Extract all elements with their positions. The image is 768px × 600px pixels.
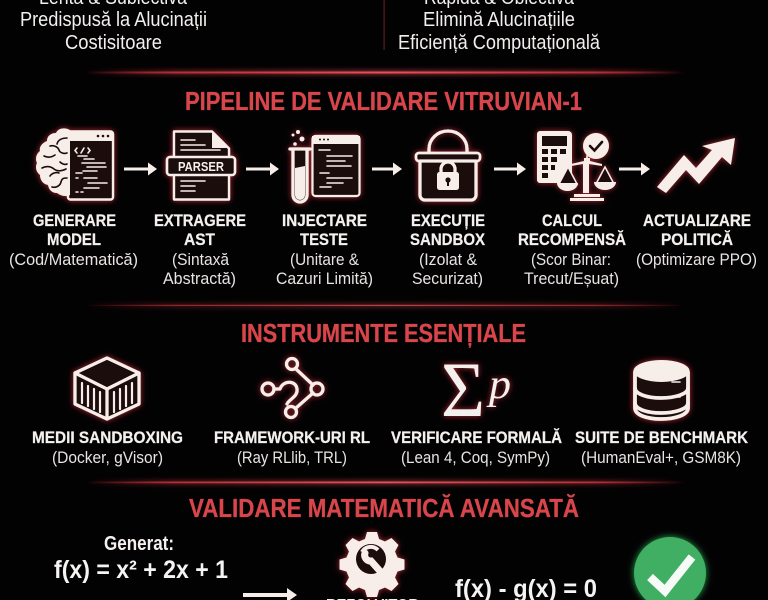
- generated formula: [54, 533, 228, 584]
- icon: workflow network: [262, 358, 323, 418]
- step label: calcul recompensa: RECOMPENSĂ: [518, 230, 626, 249]
- step label: actualizare politica: ACTUALIZARE: [643, 212, 751, 230]
- icon: green check: [634, 537, 706, 600]
- icon: solver gear and wrench: [340, 532, 404, 597]
- step label: injectare teste: TESTE: [300, 231, 348, 249]
- left column: traditional validation traits: [20, 0, 207, 54]
- step label: injectare teste: [276, 212, 373, 288]
- step label: extragere ast: (Sintaxă: [172, 250, 229, 269]
- right column: automated validation traits: Elimină Alucinațiile: [423, 9, 575, 31]
- right column: automated validation traits: [398, 0, 601, 54]
- step label: generare model: MODEL: [47, 231, 101, 249]
- icon: growth arrow: [657, 138, 735, 193]
- step label: injectare teste: INJECTARE: [282, 212, 367, 230]
- generated formula: f(x) = x² + 2x + 1: [54, 556, 228, 584]
- icon: database: [634, 360, 690, 419]
- left column: traditional validation traits: Predispusă la Alucinații: [20, 9, 207, 31]
- heading: tools: INSTRUMENTE ESENȚIALE: [241, 320, 526, 348]
- tool label: formal verification: (Lean 4, Coq, SymPy): [401, 448, 550, 467]
- tool label: sandboxing: (Docker, gVisor): [52, 448, 163, 467]
- step label: executie sandbox: (Izolat &: [419, 250, 478, 269]
- arrow: [494, 162, 526, 176]
- arrow: [372, 162, 402, 176]
- step label: extragere ast: Abstractă): [163, 269, 236, 288]
- step label: extragere ast: EXTRAGERE: [154, 212, 246, 230]
- icon: container: [75, 358, 139, 419]
- tool label: rl frameworks: [214, 429, 370, 467]
- icon: sigma p: p: [486, 362, 511, 408]
- step label: generare model: (Cod/Matematică): [9, 250, 138, 269]
- heading: math validation: VALIDARE MATEMATICĂ AVANSATĂ: [189, 494, 579, 523]
- step label: executie sandbox: Securizat): [412, 269, 483, 288]
- step label: injectare teste: Cazuri Limită): [276, 269, 373, 288]
- tool label: sandboxing: MEDII SANDBOXING: [32, 429, 183, 447]
- step label: actualizare politica: (Optimizare PPO): [636, 250, 757, 269]
- tool label: rl frameworks: (Ray RLlib, TRL): [237, 448, 347, 467]
- icon: parser document: [167, 132, 235, 200]
- left column: traditional validation traits: Costisitoare: [65, 32, 162, 54]
- step label: executie sandbox: EXECUȚIE: [411, 212, 485, 230]
- tool label: benchmarks: SUITE DE BENCHMARK: [575, 429, 748, 447]
- step label: extragere ast: AST: [184, 231, 215, 249]
- icon: parser document: PARSER: [178, 160, 224, 174]
- icon: sigma p: [441, 346, 511, 433]
- arrow: [243, 588, 297, 600]
- tool label: sandboxing: [32, 429, 183, 467]
- icon: sandbox lock: [416, 131, 480, 200]
- tool label: formal verification: VERIFICARE FORMALĂ: [391, 428, 562, 447]
- right column: automated validation traits: Eficiență Computațională: [398, 32, 601, 54]
- step label: generare model: GENERARE: [33, 212, 116, 230]
- step label: actualizare politica: [636, 212, 757, 269]
- tool label: formal verification: [391, 428, 562, 467]
- panel: comparison text cropped at top: [20, 0, 601, 54]
- icon: test tube and code window: [290, 130, 360, 202]
- step label: calcul recompensa: [518, 212, 626, 288]
- step label: calcul recompensa: (Scor Binar:: [531, 250, 611, 269]
- icon: brain and code window: [36, 128, 113, 200]
- tool label: rl frameworks: FRAMEWORK-URI RL: [214, 429, 370, 447]
- generated formula: Generat:: [104, 533, 174, 555]
- tool label: benchmarks: (HumanEval+, GSM8K): [581, 448, 741, 467]
- step label: injectare teste: (Unitare &: [290, 250, 360, 269]
- heading: pipeline: PIPELINE DE VALIDARE VITRUVIAN-1: [185, 88, 582, 116]
- arrow: [619, 162, 650, 176]
- step label: calcul recompensa: CALCUL: [542, 212, 602, 230]
- step label: extragere ast: [154, 212, 246, 288]
- column divider: [384, 0, 385, 50]
- arrow: [124, 162, 157, 176]
- arrow: [246, 162, 279, 176]
- icon: calculator, check and scales: [537, 131, 616, 201]
- tool label: benchmarks: [575, 429, 748, 467]
- step label: executie sandbox: [410, 212, 485, 288]
- panel: pipeline steps: [9, 128, 757, 288]
- panel: essential tools: [32, 346, 748, 467]
- step label: generare model: [9, 212, 138, 269]
- icon: sigma p: Σ: [441, 346, 485, 433]
- step label: calcul recompensa: Trecut/Eșuat): [524, 269, 619, 288]
- step label: executie sandbox: SANDBOX: [410, 231, 485, 249]
- step label: actualizare politica: POLITICĂ: [661, 230, 733, 249]
- panel: math validation: [54, 532, 706, 600]
